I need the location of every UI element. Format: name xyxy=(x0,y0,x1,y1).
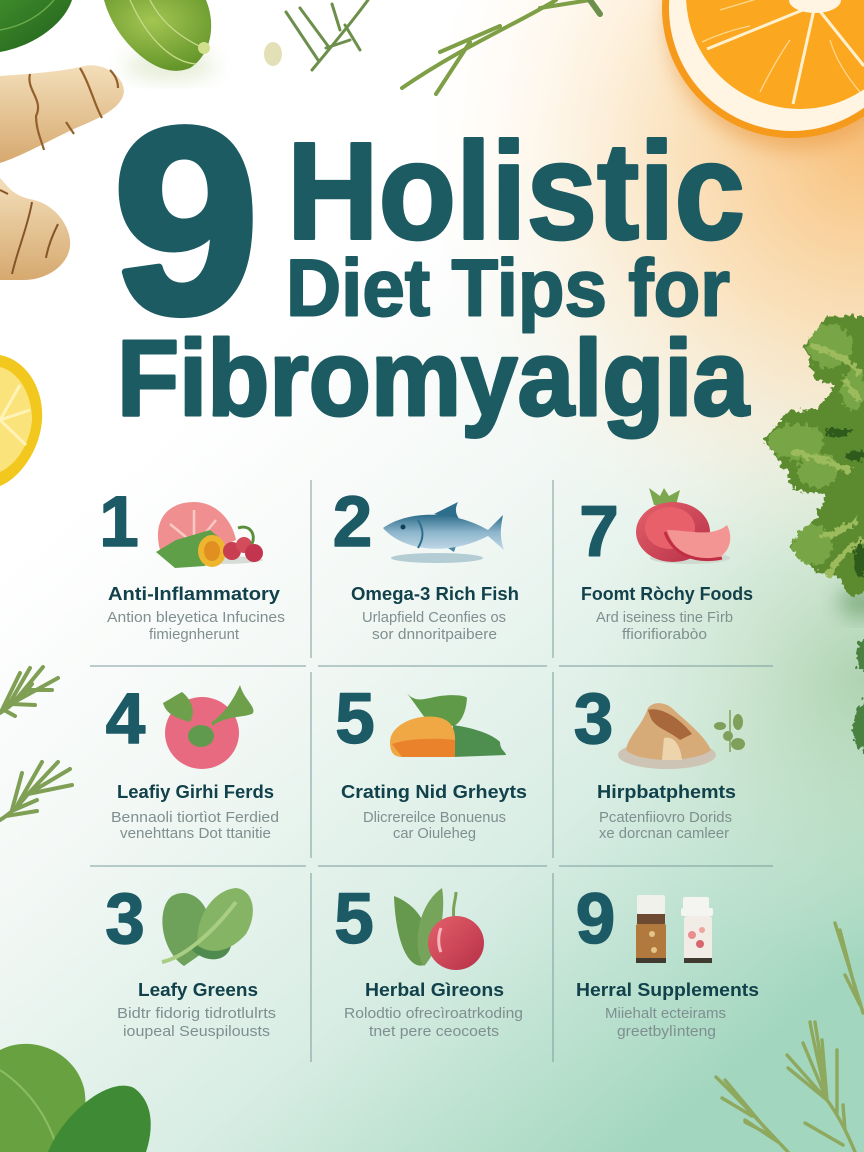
panel: tip 7 xyxy=(105,880,276,1040)
number 7: 7 xyxy=(579,492,619,572)
tip description: sor dnnoritpaibere xyxy=(372,627,497,643)
panel: tip 6 xyxy=(574,680,745,842)
number 2: 2 xyxy=(333,483,372,562)
decoration: lemon slice xyxy=(0,355,42,486)
icon: supplement bottles xyxy=(636,895,713,963)
tip description xyxy=(117,1006,276,1040)
tip heading: Foomt Ròchy Foods xyxy=(581,583,753,604)
grid dividers xyxy=(90,480,773,1062)
tip description: Antion bleyetica Infucines xyxy=(107,610,285,626)
tip description xyxy=(111,810,279,842)
decoration: top-left cucumber xyxy=(0,0,72,52)
number 9: 9 xyxy=(576,880,615,959)
tip description: Bidtr fidorig tidrotlulrts xyxy=(117,1006,276,1022)
tip heading: Herbal Gìreons xyxy=(365,979,504,1000)
decoration: bottom-right sprigs xyxy=(716,923,863,1152)
icon: grapefruit and vegetables xyxy=(156,502,263,568)
tip heading: Hirpbatphemts xyxy=(597,781,736,802)
tip description: xe dorcnan camleer xyxy=(599,826,729,842)
tip description xyxy=(363,810,506,842)
tip description: ffiorifiorabòo xyxy=(622,627,707,643)
panel: tip 8 xyxy=(334,880,523,1040)
tip heading: Leafy Greens xyxy=(138,979,258,1000)
panel: tip 3 xyxy=(579,488,753,643)
tip description: Rolodtio ofrecìroatrkoding xyxy=(344,1006,523,1022)
decoration: parsley at right xyxy=(762,316,864,618)
decoration: green fruit xyxy=(104,0,216,80)
number 1: 1 xyxy=(99,483,139,562)
icon: baked food and leaves xyxy=(390,693,506,757)
panel: tip 2 xyxy=(333,483,519,643)
title xyxy=(113,73,750,438)
panel: tip 4 xyxy=(106,680,279,842)
tip description: Ard iseiness tine Fìrb xyxy=(596,610,733,626)
icon: tomato xyxy=(636,488,730,564)
icon: fish xyxy=(383,502,504,563)
number 3: 3 xyxy=(574,680,613,759)
tip description: tnet pere ceocoets xyxy=(369,1024,499,1040)
tip description xyxy=(362,610,506,643)
tip description xyxy=(605,1006,726,1040)
icon: spinach leaves xyxy=(162,888,253,966)
tip description: Pcatenfiiovro Dorids xyxy=(599,810,732,826)
tip description xyxy=(344,1006,523,1040)
tip heading: Omega-3 Rich Fish xyxy=(351,583,519,604)
icon: nuts and sprig xyxy=(618,703,745,769)
number 3: 3 xyxy=(105,880,145,959)
tip description: Miiehalt ecteirams xyxy=(605,1006,726,1022)
tip description: ioupeal Seuspilousts xyxy=(123,1024,270,1040)
decoration: top herb sprigs xyxy=(264,0,600,94)
icon: pink fruit with leaves xyxy=(163,685,253,769)
title line: Holistic: Holistic xyxy=(287,114,745,268)
tip description: Dlicrereilce Bonuenus xyxy=(363,810,506,826)
number 5: 5 xyxy=(334,880,374,959)
tip description: Urlapfield Ceonfies os xyxy=(362,610,506,626)
tip description xyxy=(107,610,285,643)
tip description: Bennaoli tiortìot Ferdied xyxy=(111,810,279,826)
tip description xyxy=(596,610,733,643)
tip heading: Herral Supplements xyxy=(576,979,759,1000)
decoration: ginger root upper xyxy=(0,65,124,163)
tip heading: Anti-Inflammatory xyxy=(108,583,281,604)
icon: herb leaf and apple xyxy=(394,888,484,970)
decoration: left rosemary sprigs xyxy=(0,667,72,820)
tip heading: Crating Nid Grheyts xyxy=(341,781,527,802)
tip description: car Oiuleheg xyxy=(393,826,476,842)
tip description: fimiegnherunt xyxy=(149,627,239,643)
decoration: ginger root lower xyxy=(0,178,70,280)
panel: tip 1 xyxy=(99,483,285,643)
decoration: right edge leaves xyxy=(850,639,864,757)
tip description xyxy=(599,810,732,842)
title line: Diet Tips for: Diet Tips for xyxy=(286,244,730,334)
number 5: 5 xyxy=(335,680,375,759)
number 4: 4 xyxy=(106,680,146,759)
title numeral 9: 9 xyxy=(113,73,259,368)
tip heading: Leafiy Girhi Ferds xyxy=(117,781,274,802)
tip description: greetbylìnteng xyxy=(617,1024,716,1040)
panel: tip 5 xyxy=(335,680,527,842)
title line: Fibromyalgia: Fibromyalgia xyxy=(117,317,750,438)
decoration: orange slice xyxy=(662,0,864,150)
tip description: venehttans Dot ttanitie xyxy=(120,826,271,842)
decoration: bottom-left leaves xyxy=(0,1044,151,1152)
panel: tip 9 xyxy=(576,880,759,1040)
